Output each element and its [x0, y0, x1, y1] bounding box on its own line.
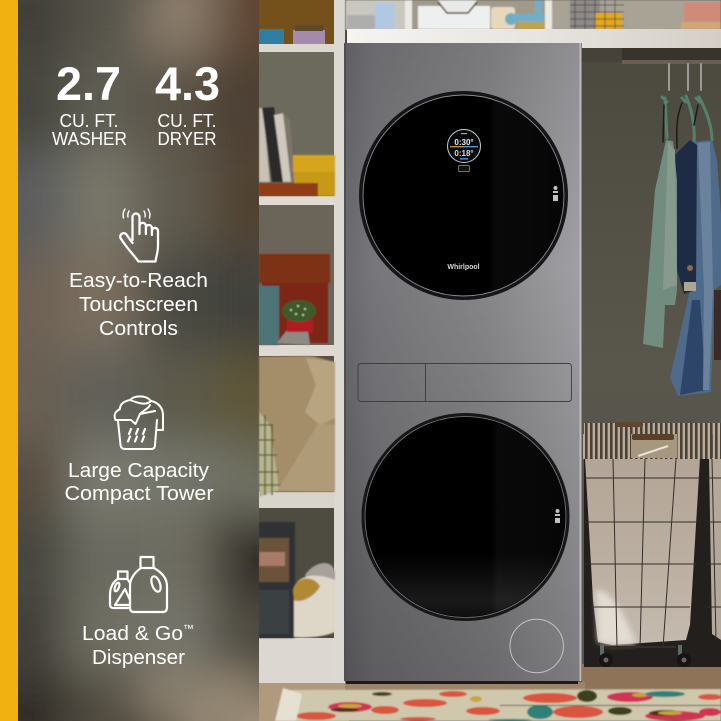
floor [259, 664, 721, 721]
capacity stat: dryer: 4.3 [155, 57, 220, 110]
touchscreen label: Controls [99, 318, 178, 340]
touchscreen label: Touchscreen [79, 294, 198, 316]
icon: touch hand [120, 209, 158, 262]
laundry hampers [583, 422, 721, 667]
fourth compartment back [259, 356, 335, 494]
capacity stat: washer [52, 57, 127, 149]
denim jeans [670, 140, 721, 396]
items on top of tower [345, 0, 721, 30]
white fold highlight [596, 590, 636, 645]
patterned rug [275, 688, 721, 721]
lilac jar [293, 25, 325, 44]
washer door [362, 413, 570, 621]
sage green top [643, 140, 677, 348]
books [259, 107, 335, 196]
brush [505, 0, 545, 29]
smooth blurred colour field [18, 0, 259, 721]
photo background: closet wall [259, 0, 721, 721]
washer handle icon [555, 509, 560, 523]
second compartment back [259, 52, 335, 198]
white box [418, 0, 490, 29]
capacity stat: washer: CU. FT. [60, 111, 118, 131]
shelf boards [259, 44, 335, 508]
dispenser label: ™ [183, 623, 194, 635]
icon: laundry basket [115, 396, 163, 449]
left blurred info panel [0, 0, 259, 721]
capacity stat: washer: WASHER [52, 129, 127, 149]
closet rail [622, 48, 721, 64]
dispenser label: Load & Go [82, 623, 183, 645]
vertical upright [334, 0, 345, 684]
storage drawers and slipper [259, 522, 335, 638]
light blue bottle [375, 3, 394, 29]
pink tray [681, 2, 721, 29]
paper roll [491, 7, 515, 29]
capacity stat: dryer: DRYER [158, 129, 216, 149]
navy jacket [675, 140, 697, 294]
hanging clothes [643, 64, 721, 396]
washer door outer ring [362, 413, 570, 621]
touchscreen label [69, 270, 208, 340]
tower shadow [346, 680, 578, 684]
cabinet body [345, 43, 581, 681]
hamper striped cuff [583, 434, 712, 459]
plinth [259, 638, 345, 683]
third compartment back [259, 205, 335, 347]
dryer door glass [363, 95, 564, 296]
washer door glass [365, 416, 566, 618]
right dark gap [714, 290, 721, 360]
hamper shadow [584, 458, 721, 667]
red boxes, teal box and cactus [259, 254, 330, 345]
back hamper rim [584, 423, 721, 435]
white frame post right [545, 0, 552, 30]
hangers [662, 64, 712, 148]
dispenser label [82, 623, 194, 669]
display screen [448, 130, 480, 162]
display screen: 0:30° [454, 138, 474, 147]
laundry tower appliance [344, 43, 582, 684]
yellow side bar [0, 0, 18, 721]
large capacity label [64, 460, 214, 505]
blurred panel background [0, 0, 259, 721]
fifth compartment back [259, 508, 335, 640]
dryer door outer ring [359, 91, 568, 300]
capacity stat: dryer [155, 57, 220, 149]
wire basket [570, 0, 624, 29]
towels [259, 356, 335, 497]
touchscreen label: Easy-to-Reach [69, 270, 208, 292]
back wall section [412, 0, 545, 30]
large capacity label: Large Capacity [68, 460, 209, 482]
dryer door [359, 91, 568, 300]
left shelving unit [259, 0, 345, 684]
brand logo: Whirlpool [447, 264, 480, 271]
large capacity label: Compact Tower [64, 483, 214, 505]
counter top [347, 29, 721, 48]
top shelf compartment back [259, 0, 335, 44]
cuff handle flap [631, 434, 677, 458]
capacity stat: washer: 2.7 [56, 57, 121, 110]
white frame post [405, 0, 412, 30]
washer glass lower reflection [366, 418, 565, 616]
icon: detergent bottles [110, 557, 167, 612]
middle control panel [358, 364, 572, 402]
display screen: 0:18° [454, 149, 474, 158]
capacity stat: dryer: CU. FT. [158, 111, 216, 131]
top shelf back panel [345, 0, 721, 30]
light glass backdrop [346, 0, 405, 30]
round access cover [510, 619, 563, 673]
start button [458, 166, 470, 172]
casters [599, 645, 691, 667]
hamper 2 canvas sliver [709, 458, 721, 640]
grey jar [347, 15, 375, 29]
closet dark header under counter [582, 48, 721, 62]
blue box [259, 29, 284, 44]
dispenser label: Dispenser [92, 647, 185, 669]
door handle icon [553, 186, 558, 201]
wire frame [584, 459, 721, 648]
hamper 1 canvas bag [585, 458, 700, 645]
